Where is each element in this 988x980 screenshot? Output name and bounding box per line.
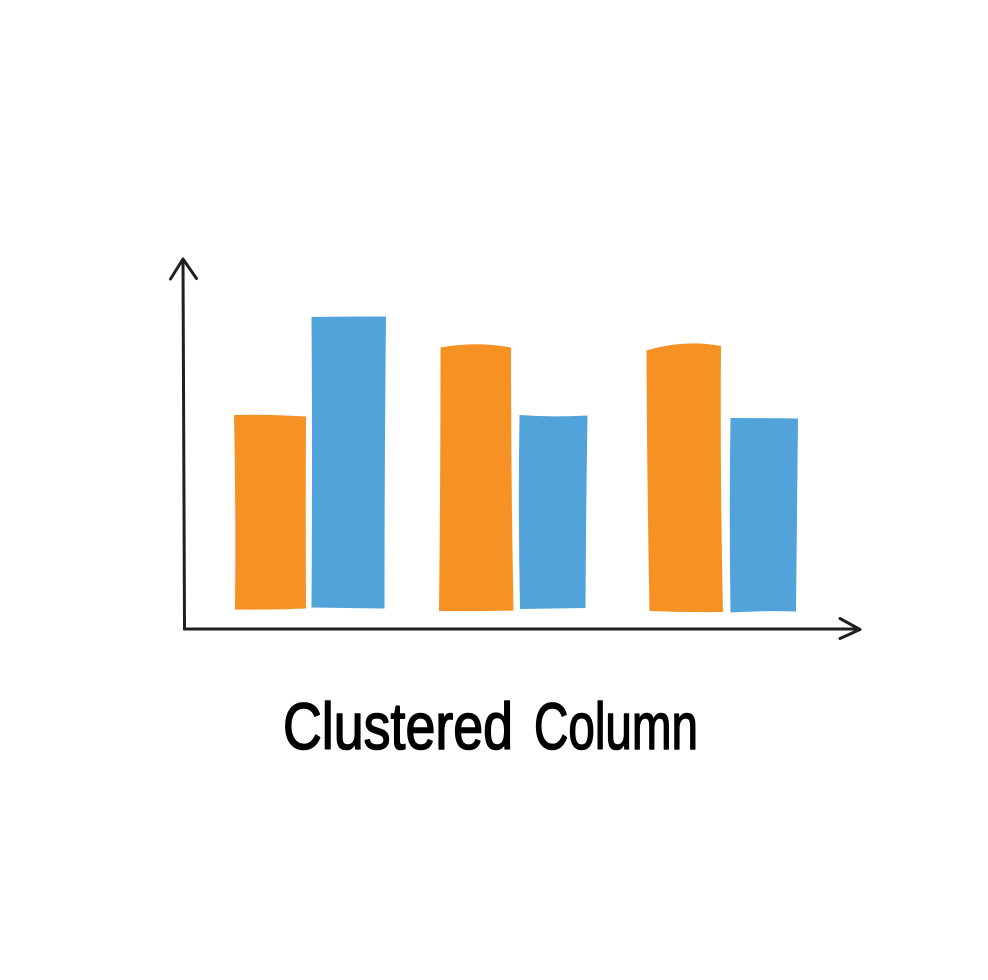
group 3 blue bar: [730, 418, 798, 612]
title: Column: [534, 689, 698, 763]
title: Clustered: [283, 689, 513, 763]
group 1 orange bar: [234, 415, 306, 610]
group 3 orange bar: [646, 343, 723, 612]
group 1 blue bar: [312, 316, 386, 608]
group 2 blue bar: [519, 415, 588, 609]
group 2 orange bar: [439, 344, 514, 611]
y axis arrow: [170, 259, 196, 629]
chart: clustered columns with axes: [170, 259, 860, 638]
x axis arrow: [184, 618, 860, 638]
title: [283, 689, 698, 763]
